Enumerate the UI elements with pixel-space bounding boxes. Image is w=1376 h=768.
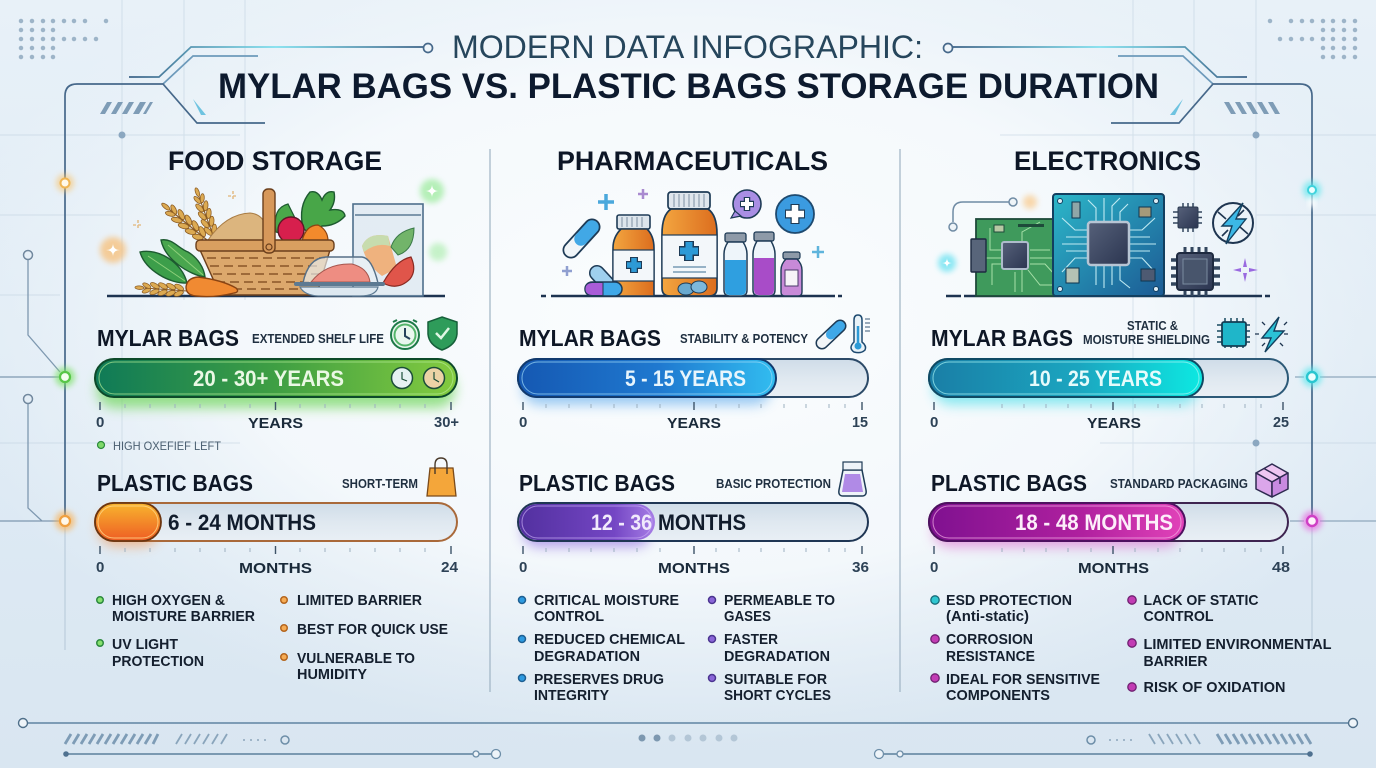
list: mylar pharma benefits: DEGRADATION [534, 648, 640, 665]
list: mylar electronics benefits: COMPONENTS [946, 687, 1050, 704]
axis: years 0 to 15: 15 [852, 414, 868, 431]
bar: plastic food 6-24 months [95, 503, 457, 546]
list: plastic food drawbacks: VULNERABLE TO [297, 650, 415, 667]
axis: months 0 to 24: 24 [441, 559, 459, 576]
label: plastic bags: PLASTIC BAGS [931, 470, 1087, 496]
list: mylar electronics benefits [931, 592, 1100, 704]
axis: years 0 to 25: YEARS [1087, 415, 1141, 432]
bar: plastic pharma 12-36 months: MONTHS [658, 510, 746, 535]
bar: plastic pharma 12-36 months [518, 503, 868, 547]
bar: plastic electronics 18-48 months [929, 503, 1288, 547]
bar: mylar electronics 10-25 years: 10 - 25 YEARS [1029, 366, 1162, 391]
list: mylar electronics benefits: ESD PROTECTION [946, 592, 1072, 609]
axis: months 0 to 36: 36 [852, 559, 869, 576]
list: mylar food benefits: HIGH OXYGEN & [112, 592, 225, 609]
axis: years 0 to 25: 0 [930, 414, 938, 431]
tag: static and moisture shielding: STATIC & [1127, 319, 1178, 333]
axis: years 0 to 30+: 0 [96, 414, 104, 431]
axis: months 0 to 36: 0 [519, 559, 527, 576]
icon: plastic pouch [839, 462, 866, 496]
bar: mylar pharma 5-15 years [518, 359, 868, 405]
bar: plastic pharma 12-36 months: 12 - 36 [591, 510, 652, 535]
panel: pharmaceuticals [518, 146, 870, 704]
axis: months 0 to 24: MONTHS [239, 560, 312, 577]
list: mylar pharma benefits: INTEGRITY [534, 687, 609, 704]
list: plastic pharma drawbacks: DEGRADATION [724, 648, 830, 665]
pagination dots [638, 734, 738, 742]
list: plastic electronics drawbacks [1128, 592, 1332, 696]
label: plastic bags: PLASTIC BAGS [97, 470, 253, 496]
axis: years 0 to 30+ [96, 402, 459, 432]
glowing nodes [55, 174, 1322, 531]
axis: years 0 to 25 [930, 402, 1289, 432]
axis: years 0 to 30+: 30+ [434, 414, 459, 431]
axis: years 0 to 15 [519, 402, 868, 432]
list: mylar electronics benefits: (Anti-static) [946, 608, 1029, 625]
list: mylar pharma benefits: REDUCED CHEMICAL [534, 631, 685, 648]
column divider right [899, 149, 901, 692]
dot matrix top right [1270, 21, 1355, 57]
footer circuit decoration [18, 718, 1358, 758]
bar: plastic electronics 18-48 months: 18 - 48 MONTHS [1015, 510, 1173, 535]
dot matrix top left [21, 21, 106, 57]
bar: mylar food 20-30+ years: 20 - 30+ YEARS [193, 366, 344, 391]
panel: electronics [929, 146, 1332, 704]
panel: food storage [95, 146, 459, 683]
list: plastic pharma drawbacks: FASTER [724, 631, 778, 648]
label: mylar bags: MYLAR BAGS [519, 325, 661, 351]
icon: parcel box [1256, 464, 1288, 497]
icon: capsule [822, 326, 840, 343]
list: plastic electronics drawbacks: LACK OF STATIC [1144, 592, 1259, 609]
note: oxygen legend: HIGH OXEFIEF LEFT [113, 439, 222, 453]
bar: plastic food 6-24 months: 6 - 24 MONTHS [168, 510, 316, 535]
tag: static and moisture shielding [1083, 319, 1210, 347]
icon: bar clocks [392, 368, 444, 388]
tag: short-term: SHORT-TERM [342, 477, 418, 491]
label: mylar bags: MYLAR BAGS [97, 325, 239, 351]
tag: extended shelf life: EXTENDED SHELF LIFE [252, 332, 384, 346]
tag: standard packaging: STANDARD PACKAGING [1110, 477, 1248, 491]
title [218, 29, 1159, 106]
list: plastic pharma drawbacks: SHORT CYCLES [724, 687, 831, 704]
list: mylar pharma benefits [522, 592, 685, 704]
axis: years 0 to 30+: YEARS [248, 415, 303, 432]
icon: microchip [1217, 318, 1250, 348]
bar: mylar electronics 10-25 years [929, 359, 1288, 405]
axis: months 0 to 36 [519, 546, 869, 577]
axis: years 0 to 15: 0 [519, 414, 527, 431]
axis: months 0 to 48: 0 [930, 559, 938, 576]
illustration: medicine bottles [541, 189, 842, 296]
label: plastic bags: PLASTIC BAGS [519, 470, 675, 496]
list: mylar food benefits: UV LIGHT [112, 636, 178, 653]
title line two: MYLAR BAGS VS. PLASTIC BAGS STORAGE DURATION [218, 67, 1159, 106]
heading: food storage: FOOD STORAGE [168, 146, 382, 176]
icon: clock [391, 320, 419, 349]
list: mylar pharma benefits: PRESERVES DRUG [534, 671, 664, 688]
list: mylar electronics benefits: IDEAL FOR SENSITIVE [946, 671, 1100, 688]
axis: months 0 to 48: MONTHS [1078, 560, 1149, 577]
illustration: food basket and bag [100, 179, 447, 299]
heading: pharmaceuticals: PHARMACEUTICALS [557, 146, 828, 176]
hatch accents [100, 102, 1280, 114]
axis: months 0 to 24 [96, 546, 459, 577]
list: plastic pharma drawbacks: SUITABLE FOR [724, 671, 827, 688]
list: plastic electronics drawbacks: BARRIER [1144, 653, 1208, 670]
list: mylar food benefits: PROTECTION [112, 653, 204, 670]
column divider left [489, 149, 491, 692]
icon: thermometer [851, 315, 870, 353]
list: mylar pharma benefits: CRITICAL MOISTURE [534, 592, 679, 609]
list: plastic food drawbacks: BEST FOR QUICK USE [297, 621, 448, 638]
icon: shield [428, 317, 457, 350]
list: mylar food benefits: MOISTURE BARRIER [112, 608, 255, 625]
list: plastic pharma drawbacks: GASES [724, 608, 771, 625]
title line one: MODERN DATA INFOGRAPHIC: [452, 29, 923, 65]
bar: mylar pharma 5-15 years: 5 - 15 YEARS [625, 366, 746, 391]
list: plastic electronics drawbacks: CONTROL [1144, 608, 1214, 625]
list: plastic pharma drawbacks [712, 592, 835, 704]
list: plastic pharma drawbacks: PERMEABLE TO [724, 592, 835, 609]
axis: months 0 to 48 [930, 546, 1290, 577]
list: plastic electronics drawbacks: LIMITED ENVIRONMENTAL [1144, 636, 1332, 653]
list: plastic electronics drawbacks: RISK OF OXIDATION [1144, 679, 1286, 696]
label: mylar bags: MYLAR BAGS [931, 325, 1073, 351]
axis: months 0 to 48: 48 [1272, 559, 1290, 576]
axis: years 0 to 15: YEARS [667, 415, 721, 432]
side circuit connectors [0, 250, 1376, 521]
title frame circuit lines [65, 44, 1312, 650]
list: plastic food drawbacks [284, 592, 448, 683]
tag: basic protection: BASIC PROTECTION [716, 477, 831, 491]
illustration: circuit boards and chips [938, 194, 1270, 296]
axis: months 0 to 24: 0 [96, 559, 104, 576]
icon: lightning spark [1255, 317, 1288, 352]
axis: months 0 to 36: MONTHS [658, 560, 730, 577]
icon: shopping bag [427, 458, 456, 496]
list: plastic food drawbacks: LIMITED BARRIER [297, 592, 422, 609]
list: mylar electronics benefits: RESISTANCE [946, 648, 1035, 665]
list: mylar food benefits [100, 592, 255, 670]
axis: years 0 to 25: 25 [1273, 414, 1289, 431]
list: mylar electronics benefits: CORROSION [946, 631, 1033, 648]
tag: static and moisture shielding: MOISTURE SHIELDING [1083, 333, 1210, 347]
list: mylar pharma benefits: CONTROL [534, 608, 604, 625]
heading: electronics: ELECTRONICS [1014, 146, 1201, 176]
list: plastic food drawbacks: HUMIDITY [297, 666, 367, 683]
bar: mylar food 20-30+ years [95, 359, 457, 408]
tag: stability and potency: STABILITY & POTENCY [680, 332, 809, 346]
